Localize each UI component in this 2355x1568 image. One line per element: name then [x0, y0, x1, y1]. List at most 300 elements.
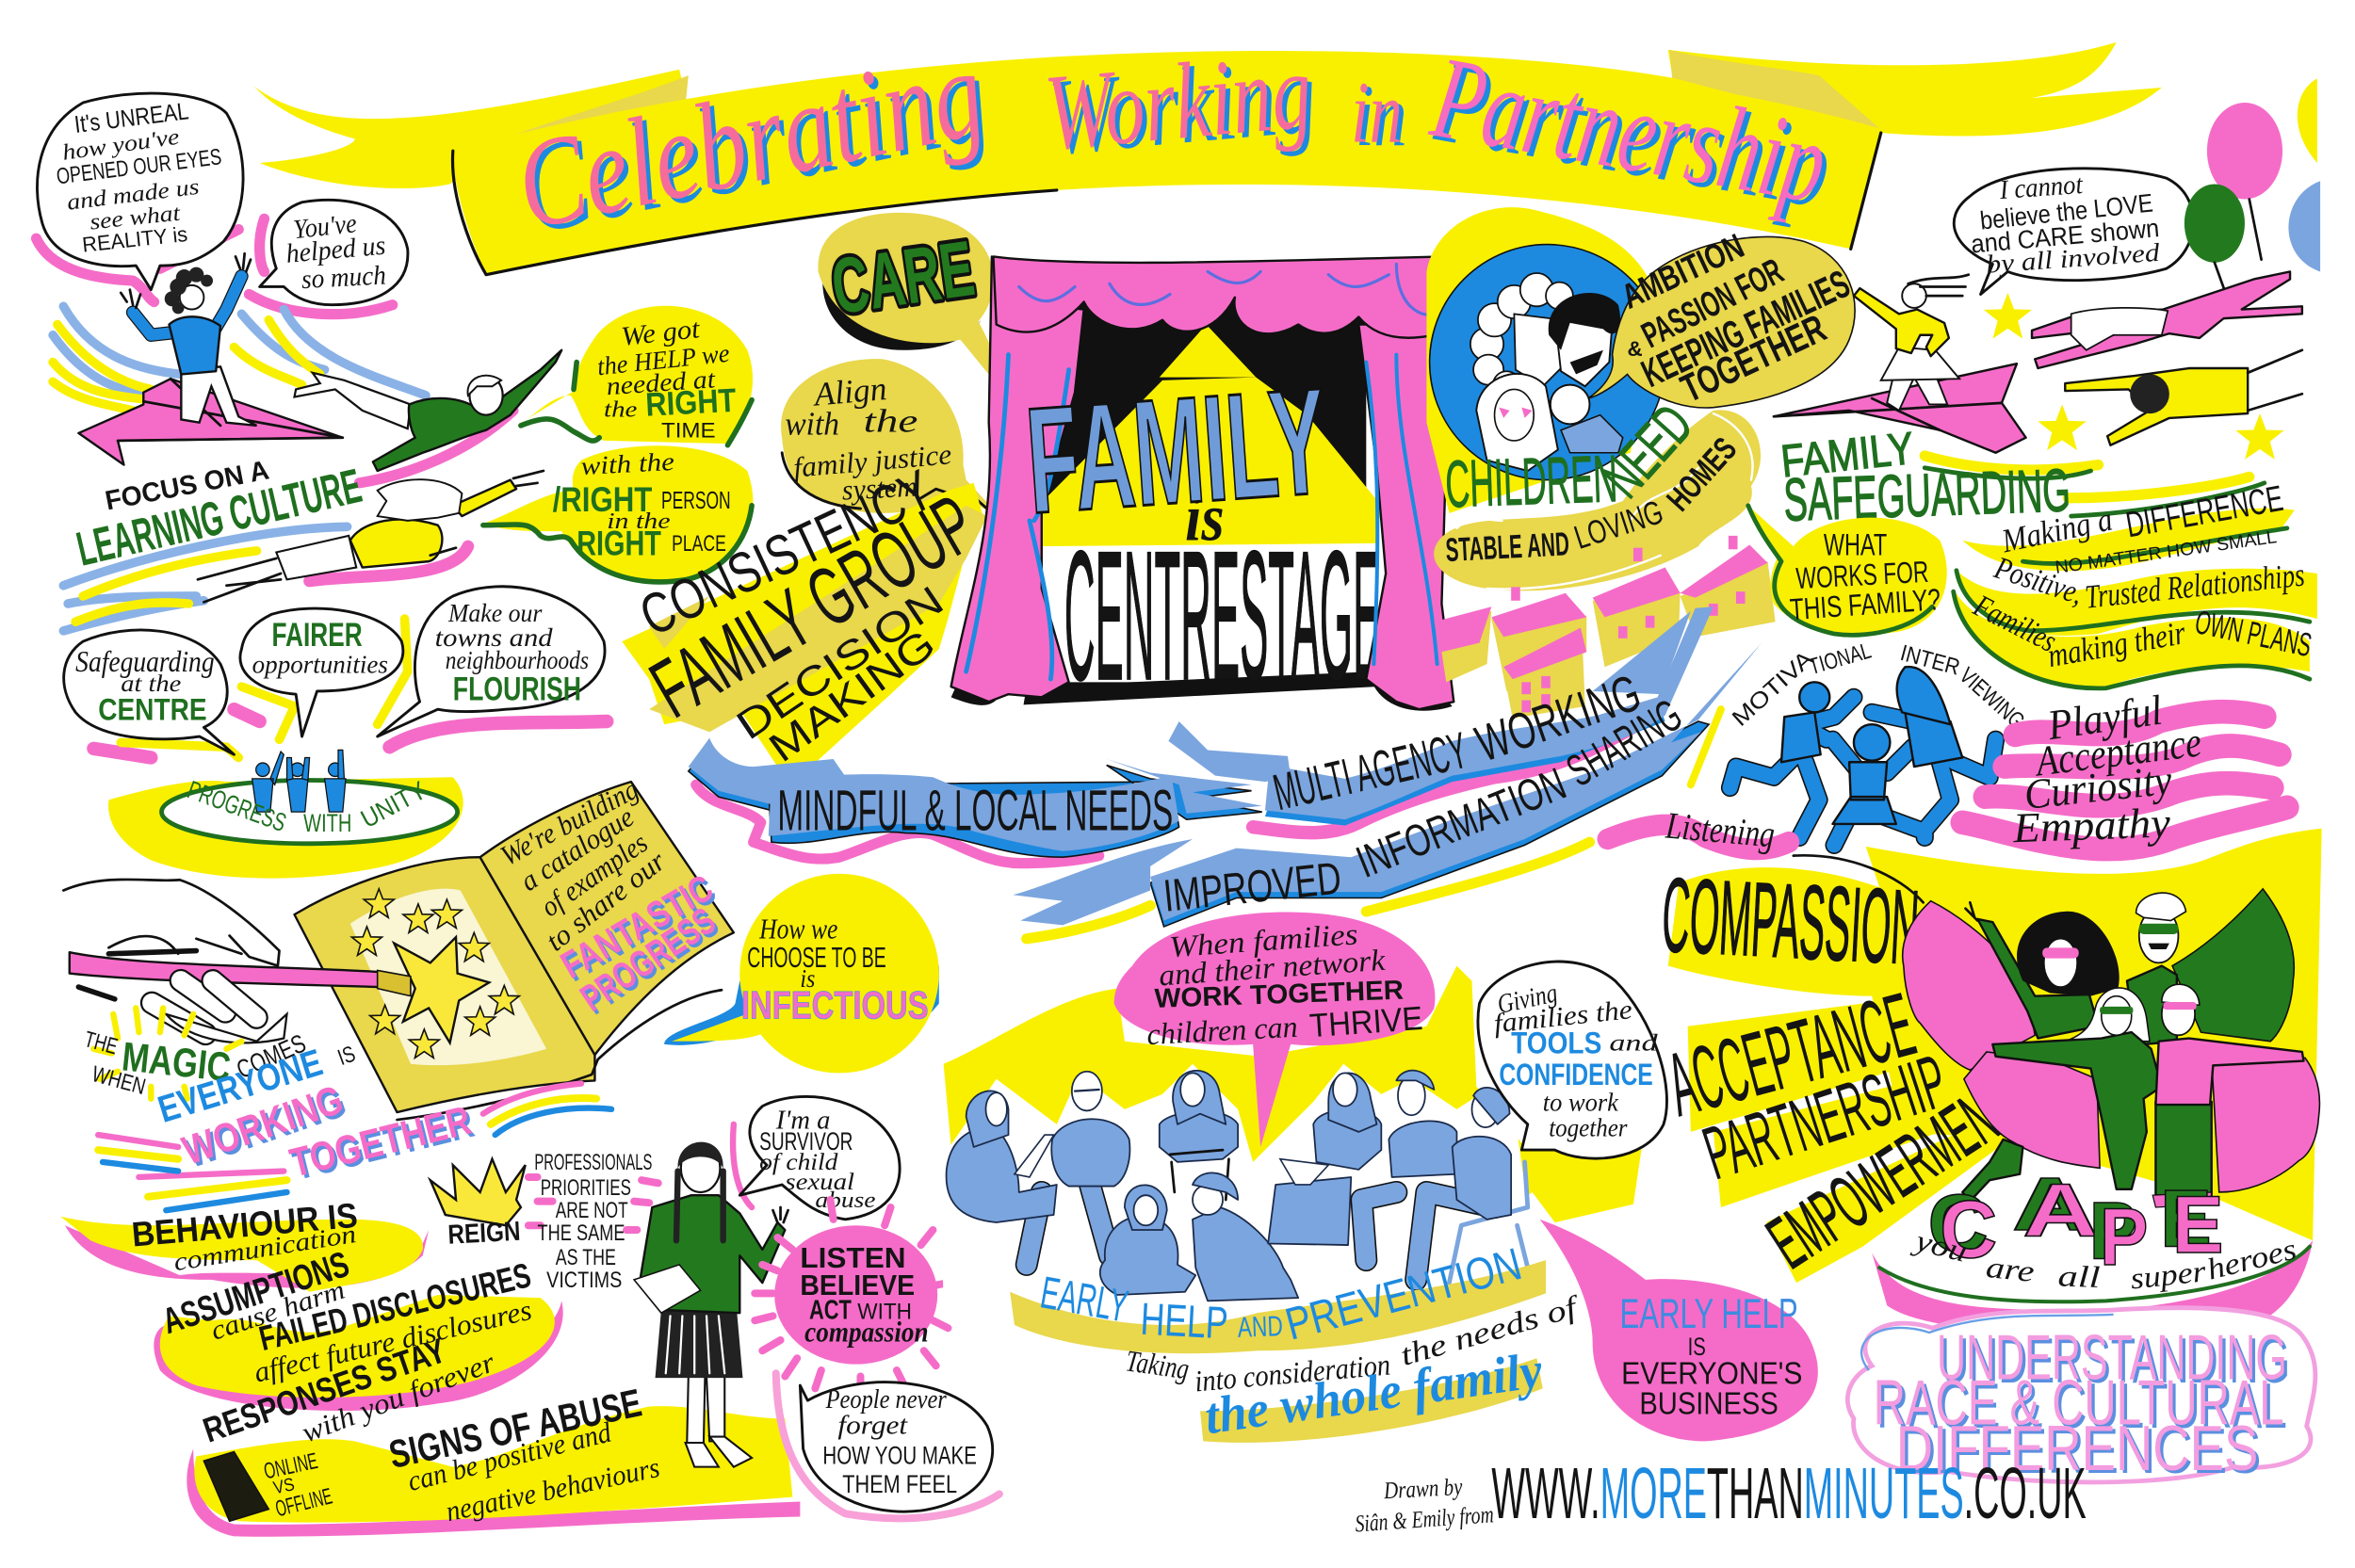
sun rays — [755, 1200, 948, 1396]
understanding race cloud: DIFFERENCES — [1899, 1416, 2262, 1487]
left curtain — [951, 256, 1084, 702]
ambition speech bubble — [1588, 226, 1856, 411]
ambition speech bubble: AMBITION — [1616, 226, 1749, 316]
mum curly hair — [1470, 273, 1573, 398]
family safeguarding stripes — [1954, 478, 2317, 688]
bubble text: TIME — [661, 419, 716, 443]
yellow bubble: infectious: is — [800, 964, 815, 993]
children need homes — [1434, 393, 1761, 590]
schoolgirl: sexual — [785, 1168, 854, 1195]
yellow bubble: right person: in the — [607, 509, 671, 534]
you are all super heroes: you — [1909, 1222, 1971, 1269]
bubble: align with the family justice system: family justice — [792, 438, 952, 484]
bubble: giving families tools: CONFIDENCE — [1499, 1058, 1653, 1091]
yellow list blobs: RESPONSES STAY — [198, 1331, 450, 1450]
head — [469, 376, 503, 415]
black lash shading — [78, 951, 196, 999]
early help and prevention: the needs of — [1396, 1288, 1584, 1372]
reign crown and professionals text: THE SAME — [538, 1220, 625, 1246]
lower right cape — [2212, 1058, 2319, 1192]
flying figures right — [1984, 271, 2302, 460]
banner title text: Working — [1046, 34, 1321, 177]
pink attitude bands and words: Acceptance — [2031, 719, 2204, 785]
yellow fills — [60, 1217, 423, 1292]
woman: arm and torso — [1977, 919, 2099, 1039]
yellow list blobs: SIGNS OF ABUSE — [385, 1380, 645, 1477]
child girl body — [1992, 1032, 2162, 1189]
phone icon — [203, 1452, 268, 1521]
yellow bubble: right person: with the — [580, 447, 675, 480]
is text: is — [1185, 482, 1225, 556]
pink bubble: when families: THRIVE — [1308, 1000, 1424, 1044]
bubble: love and care: I cannot — [1998, 170, 2085, 205]
reign crown and professionals text: ARE NOT — [556, 1198, 628, 1223]
three blue figures — [252, 750, 346, 812]
ambition speech bubble: & — [1628, 337, 1643, 361]
children need text: CHILDREN — [1444, 441, 1618, 521]
family safeguarding stripes: making their — [2045, 614, 2188, 674]
banner left tail — [253, 70, 689, 188]
yellow list blobs — [60, 1196, 800, 1537]
progress with unity: PROGRESS — [184, 775, 290, 837]
yellow sparkle — [93, 1008, 241, 1099]
yellow bubble: right person: PLACE — [672, 531, 726, 557]
page text: PROGRESS — [574, 900, 723, 1020]
bubble: align with the family justice system — [781, 359, 1004, 521]
ribbon: multi agency — [1168, 606, 1713, 826]
bubble text: needed at — [606, 364, 717, 400]
bubble row: safeguarding fairer flourish: Safeguarding — [75, 644, 215, 678]
banner title text: Celebrating — [505, 22, 995, 257]
pink bubble: when families: When families — [1168, 916, 1359, 963]
person 5 child — [1193, 1172, 1298, 1301]
family safeguarding heading: FAMILY — [1778, 423, 1916, 487]
you are all super heroes: all — [2057, 1258, 2101, 1294]
bubble: love and care: by all involved — [1985, 238, 2161, 279]
consistency family group banner: CONSISTENCY — [630, 458, 942, 648]
magic comes when everyone is working together: MAGIC — [120, 1034, 233, 1091]
bubble: people never forget — [776, 1373, 999, 1518]
pink bubble: when families: children can — [1146, 1010, 1298, 1051]
boy — [1551, 385, 1623, 453]
family safeguarding stripes: Families — [1968, 588, 2062, 659]
bubble text: unreal: REALITY is — [81, 222, 188, 257]
consistency family group banner: MAKING — [761, 622, 944, 771]
cape letters: P — [2100, 1192, 2148, 1283]
bubble: align with the family justice system: system — [841, 471, 918, 507]
listen believe sun: ACT — [809, 1296, 852, 1326]
big yellow backdrop — [1668, 829, 2322, 1240]
ribbon: improved information sharing: IMPROVED — [1161, 852, 1343, 922]
person 2 — [1051, 1072, 1129, 1255]
bubble: giving families tools: TOOLS — [1511, 1026, 1601, 1060]
early help and prevention — [1010, 1238, 1584, 1445]
ribbon: mindful: MINDFUL & LOCAL NEEDS — [777, 778, 1173, 842]
band 1 — [1962, 509, 2295, 571]
stage floor — [951, 664, 1453, 711]
bubble text: helped us: You've — [292, 208, 358, 245]
early help and prevention: into consideration — [1194, 1347, 1391, 1398]
boy top and arm — [2155, 1039, 2303, 1105]
reign crown and professionals text: VICTIMS — [546, 1268, 622, 1293]
bubble row: safeguarding fairer flourish: neighbourhoods — [446, 646, 589, 674]
person 3 — [1160, 1071, 1238, 1200]
bubble shape with tail — [521, 306, 753, 444]
reign crown and professionals text: REIGN — [447, 1217, 521, 1251]
ribbon: improved information sharing — [1013, 643, 1762, 927]
pink flyer — [2032, 271, 2302, 368]
motivational interviewing: TIONAL — [1806, 639, 1874, 680]
pink bubble: early help — [1540, 1220, 1818, 1441]
pink bubble: early help: IS — [1688, 1332, 1706, 1361]
right torso — [1905, 712, 1962, 767]
bubble text: unreal: It's UNREAL — [73, 98, 190, 138]
yellow bubble: right person: RIGHT — [577, 525, 661, 563]
care bubble: CARE — [826, 224, 980, 331]
yellow backing — [1426, 207, 1661, 513]
person on paper plane — [78, 253, 343, 465]
boy legs and shoes — [2155, 1102, 2212, 1195]
page text: PROGRESS — [577, 903, 726, 1023]
house fourth — [1593, 591, 1681, 667]
white hair — [2071, 308, 2168, 350]
yellow stars — [1984, 293, 2284, 460]
bubble: helped us — [260, 200, 408, 305]
schoolgirl: I'm a — [775, 1106, 830, 1136]
left torso — [1781, 712, 1821, 762]
schoolgirl — [634, 1096, 900, 1467]
magic comes when everyone is working together: EVERYONE — [154, 1042, 327, 1131]
man torso — [2127, 966, 2177, 1044]
motivational interviewing: INTER — [1897, 640, 1962, 681]
you are all super heroes — [1872, 1222, 2313, 1334]
magic comes when everyone is working together — [82, 1008, 611, 1210]
dad face and dark hair — [1549, 293, 1620, 386]
banner body — [453, 51, 1881, 275]
swooshes under bubbles — [93, 709, 607, 757]
left wing — [1903, 901, 2035, 1070]
page text — [495, 773, 726, 1023]
yellow list blobs: can be positive and — [404, 1415, 615, 1497]
bubble: giving families tools: Giving — [1495, 978, 1560, 1020]
yellow list blobs: affect future disclosures — [251, 1294, 535, 1389]
woman leg and boot — [1962, 1140, 2022, 1202]
bubble text: unreal: and made us — [66, 175, 201, 216]
hands — [121, 253, 251, 308]
banner title text: Working — [1041, 29, 1316, 173]
legs — [1887, 374, 1947, 411]
top left speech bubbles — [37, 93, 408, 315]
bubble: survivor — [733, 1124, 752, 1207]
pink attitude bands and words: Curiosity — [2022, 756, 2174, 818]
yellow list blobs: negative behaviours — [443, 1451, 662, 1528]
open book — [295, 773, 734, 1120]
band 3 — [1954, 589, 2310, 687]
pink edges — [65, 1225, 429, 1288]
bubble: align with the family justice system: with — [785, 406, 839, 443]
banner title text: Partnership — [1422, 32, 1836, 229]
cape letters — [1927, 1161, 2224, 1283]
progress with unity — [108, 750, 463, 879]
flying woman yellow — [63, 471, 544, 631]
compassion yellow background and cape values: EMPOWERMENT — [1753, 1063, 2029, 1285]
skirt and legs — [276, 536, 356, 579]
banner title text — [505, 22, 1840, 262]
ribbon: improved information sharing: INFORMATION — [1350, 758, 1573, 888]
bubble: giving families tools: families the — [1492, 994, 1633, 1039]
yellow list blobs: communication — [171, 1220, 358, 1276]
motivational interviewing — [1728, 639, 2029, 845]
stripes — [98, 1084, 581, 1177]
house fifth — [1681, 561, 1776, 637]
reign crown and professionals text: AS THE — [556, 1245, 616, 1270]
white pool — [939, 1064, 1540, 1328]
person 4 child — [1100, 1185, 1195, 1295]
bubble text: unreal: how you've — [61, 125, 181, 166]
pink wand — [70, 952, 379, 987]
yellow bubble: right person: PERSON — [661, 488, 731, 514]
page text: to share our — [540, 845, 672, 958]
blue offset tail — [664, 966, 939, 1050]
you are all super heroes: super — [2129, 1253, 2208, 1295]
magic comes when everyone is working together: THE — [82, 1026, 121, 1059]
compassion yellow background and cape values: COMPASSION — [1660, 855, 1922, 987]
ribbons — [689, 606, 1762, 939]
listen believe sun — [755, 1200, 948, 1396]
flying man green — [295, 350, 561, 483]
magic comes when everyone is working together: WORKING — [177, 1077, 349, 1174]
pink bubble: when families: WORK TOGETHER — [1154, 976, 1405, 1014]
bubble text: unreal: OPENED OUR EYES — [55, 144, 223, 189]
hand and wand — [63, 880, 411, 1048]
list text: BEHAVIOUR IS — [130, 1196, 359, 1254]
understanding race cloud — [1847, 1308, 2315, 1487]
bubble: flourish — [378, 587, 605, 736]
you are all super heroes: are — [1985, 1250, 2036, 1288]
head and plaits — [681, 1144, 720, 1192]
limbs black outline — [1730, 697, 1996, 845]
yellow top — [350, 519, 442, 568]
pink dashes — [528, 1177, 658, 1230]
pink bubble: early help: EVERYONE'S — [1621, 1356, 1802, 1391]
bubble: love and care: believe the LOVE — [1978, 188, 2154, 235]
consistency family group banner: DECISION — [729, 578, 951, 749]
sweater — [373, 350, 561, 471]
consistency family group banner — [622, 458, 991, 771]
heads — [1799, 682, 1829, 712]
bubble: people never forget: HOW YOU MAKE — [822, 1440, 977, 1469]
schoolgirl: SURVIVOR — [759, 1126, 853, 1156]
man head — [2139, 909, 2178, 962]
dancing blue figures — [1730, 667, 1996, 845]
bubble: love and care: and CARE shown — [1970, 213, 2160, 259]
person 6 — [1268, 1073, 1381, 1245]
early help and prevention: AND — [1237, 1310, 1283, 1344]
yellow bubble: right time — [521, 306, 753, 445]
bubble: people never forget: THEM FEEL — [842, 1469, 957, 1498]
skirt — [1881, 348, 1959, 380]
green ellipse — [162, 780, 458, 844]
pink attitude bands and words: Listening — [1664, 803, 1777, 855]
bubble text: the HELP we — [596, 339, 731, 380]
ribbon: mindful — [689, 738, 1262, 857]
family portrait — [1426, 207, 1665, 513]
book — [634, 1265, 701, 1313]
ambition speech bubble: TOGETHER — [1674, 305, 1832, 411]
reign crown and professionals text: PROFESSIONALS — [534, 1150, 652, 1175]
ribbon: multi agency: WORKING — [1469, 664, 1648, 773]
bubble text: the — [604, 397, 638, 422]
reign crown and professionals text: PRIORITIES — [541, 1175, 631, 1201]
yellow top — [1854, 288, 1949, 356]
family safeguarding stripes: NO MATTER HOW SMALL — [2054, 527, 2279, 578]
bubble row: safeguarding fairer flourish: opportunities — [252, 651, 388, 679]
cape letters: E — [2160, 1174, 2212, 1265]
schoolgirl: abuse — [815, 1188, 876, 1213]
mustard cloud — [1434, 410, 1761, 590]
listen believe sun: compassion — [804, 1317, 929, 1349]
progress with unity: WITH — [303, 808, 351, 837]
person 1 — [947, 1091, 1057, 1265]
yellow blob — [108, 777, 463, 879]
page text: of examples — [535, 827, 654, 923]
children need homes: LOVING — [1570, 493, 1667, 557]
yellow list blobs: cause harm — [207, 1275, 349, 1347]
pink attitude bands and words: Empathy — [2011, 799, 2171, 851]
bubble: what works for this family: WORKS FOR — [1795, 555, 1929, 595]
green right wing — [2172, 889, 2294, 1042]
legs — [181, 366, 256, 426]
bubble: fairer — [240, 608, 403, 736]
valance — [993, 256, 1449, 338]
yellow bubble: right person — [483, 445, 753, 582]
head and hair — [1902, 283, 1926, 308]
paper plane — [78, 379, 343, 465]
bubble: what works for this family: WHAT — [1824, 528, 1887, 562]
banner title text: in — [1351, 65, 1403, 162]
cape letters: A — [2012, 1161, 2087, 1246]
bubble text: helped us: helped us — [284, 231, 386, 269]
houses — [1434, 536, 1776, 719]
compassion yellow background and cape values: PARTNERSHIP — [1694, 1038, 1957, 1195]
speed streaks left plane — [53, 306, 426, 411]
magic comes when everyone is working together: COMES — [232, 1028, 310, 1084]
cape letters: C — [1927, 1178, 1989, 1269]
bubble row: safeguarding fairer flourish — [64, 587, 607, 757]
bubble: giving families tools: together — [1549, 1114, 1628, 1142]
credit line: WWW.MORETHANMINUTES.CO.UK — [1491, 1453, 2087, 1534]
family safeguarding heading: SAFEGUARDING — [1782, 456, 2071, 534]
yellow list blobs: ONLINE — [262, 1448, 320, 1484]
mum face — [1514, 314, 1570, 386]
woman black hair — [2017, 912, 2120, 996]
ambition speech bubble: KEEPING FAMILIES — [1635, 261, 1856, 396]
hand outline — [63, 880, 280, 966]
bubble text — [596, 314, 738, 443]
hair and head — [378, 479, 462, 521]
yellow list blobs: OFFLINE — [273, 1483, 334, 1522]
yellow flyer — [2065, 368, 2248, 445]
listen believe sun: WITH — [857, 1300, 912, 1325]
balloons — [2184, 78, 2320, 317]
arc label: MOTIVA — [1728, 646, 1818, 732]
taking into consideration: Taking — [1124, 1343, 1192, 1385]
bubble text: We got — [620, 314, 702, 352]
band 2 — [1957, 569, 2317, 636]
early help and prevention: EARLY — [1037, 1267, 1132, 1333]
title banner — [253, 22, 2162, 275]
magic comes when everyone is working together: TOGETHER — [285, 1098, 476, 1187]
streaks — [1925, 456, 2249, 498]
pink bubble: early help: BUSINESS — [1639, 1387, 1778, 1422]
you are all super heroes: heroes — [2203, 1232, 2299, 1286]
house second — [1491, 616, 1586, 691]
right page — [480, 782, 734, 1055]
ribbon: multi agency: MULTI AGENCY — [1268, 721, 1472, 821]
superhero family — [1903, 889, 2319, 1283]
banner title text: in — [1356, 68, 1407, 165]
lower fingers — [138, 966, 287, 1048]
family text: FAMILY — [1021, 356, 1331, 545]
bubble: love and care — [1954, 169, 2193, 294]
working together text: WORKING — [180, 1080, 351, 1177]
bubble text: RIGHT — [644, 382, 738, 424]
children need homes: NEED — [1590, 393, 1705, 509]
lower left cape — [1964, 1052, 2100, 1168]
motivational interviewing: VIEWING — [1954, 663, 2029, 735]
credit line: Siân & Emily from — [1354, 1500, 1495, 1538]
heading: learning culture: LEARNING CULTURE — [72, 459, 366, 576]
pink bubble: early help: EARLY HELP — [1620, 1289, 1798, 1337]
pink swooshes under bubbles — [37, 218, 393, 315]
family circle yellow background — [944, 966, 1643, 1222]
early help and prevention: HELP — [1139, 1294, 1229, 1349]
magic comes when everyone is working together: TOGETHER — [289, 1101, 479, 1189]
page text: FANTASTIC — [554, 867, 720, 987]
yellow list blobs: with you forever — [298, 1346, 499, 1449]
seated group illustration — [939, 1064, 1540, 1328]
yellow bubble: infectious — [664, 874, 939, 1073]
pink attitude bands and words — [1608, 687, 2287, 855]
hand — [773, 1207, 788, 1222]
banner title text: Partnership — [1427, 37, 1840, 234]
striped skirt — [656, 1310, 742, 1378]
blue sweater arms — [133, 276, 241, 335]
cape letters: C — [1940, 1185, 1997, 1275]
page white glow — [350, 889, 546, 1065]
compassion yellow background and cape values: ACCEPTANCE — [1658, 974, 1925, 1136]
middle torso and skirt — [1832, 762, 1896, 824]
yellow list blobs: FAILED DISCLOSURES — [255, 1255, 534, 1358]
bubble text: helped us — [284, 208, 387, 295]
bubble row: safeguarding fairer flourish: at the — [121, 670, 181, 697]
cape letters: E — [2172, 1180, 2224, 1270]
blue sweater body — [170, 316, 220, 374]
family safeguarding stripes: DIFFERENCE — [2123, 478, 2286, 545]
yellow bubble: infectious: INFECTIOUS — [741, 983, 929, 1027]
trousers — [295, 373, 411, 428]
left page — [295, 857, 594, 1112]
bubble text: helped us: so much — [300, 260, 387, 295]
bubble: giving families tools — [1478, 962, 1666, 1158]
cape letters: A — [2022, 1167, 2099, 1252]
child girl hair — [2065, 988, 2150, 1042]
black backdrop — [1042, 286, 1366, 513]
yellow bubble: infectious: How we — [758, 913, 837, 946]
green blazer — [641, 1195, 785, 1313]
boy head — [2162, 993, 2195, 1035]
bubble row: safeguarding fairer flourish: Make our — [447, 599, 543, 627]
